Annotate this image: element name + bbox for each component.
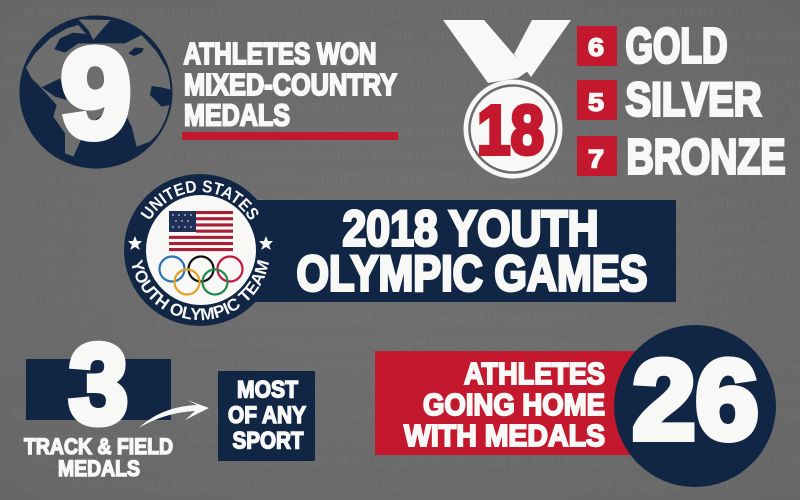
silver count: SILVER [626,72,762,126]
navy circle [614,325,776,487]
big number 9: 9 [61,23,131,164]
silver count [577,72,762,126]
panel: medal count [443,18,786,184]
logo: united states youth olympic team [124,174,273,326]
big number 26: 26 [632,338,758,462]
panel: 2018 youth olympic games banner [124,174,676,326]
callout: most of any sport [218,371,315,461]
heading: athletes won mixed-country medals: MEDALS [184,98,290,132]
arrow [139,400,209,428]
flag [169,211,233,251]
icon: medal: 18 [477,91,544,169]
banner label: GOING HOME [423,387,605,422]
gold count [577,18,728,74]
banner title: 2018 YOUTH [342,200,598,256]
panel: athletes going home with medals [375,325,776,487]
banner background [240,200,676,302]
panel: track and field medals [24,322,315,481]
bronze count: 7 [588,146,604,174]
banner label: WITH MEDALS [404,418,605,453]
callout: most of any sport: SPORT [232,428,304,454]
silver count: 5 [588,89,604,117]
heading: athletes won mixed-country medals: MIXED-COUNTRY [184,68,397,102]
logo: united states youth olympic team: UNITED STATES [140,180,258,220]
red banner [375,351,635,455]
banner label: ATHLETES [464,356,605,391]
label: track and field medals [24,434,173,481]
navy bar [26,359,171,420]
red underline [182,132,398,140]
label: track and field medals: TRACK & FIELD [24,434,173,459]
banner label [404,356,605,453]
callout: most of any sport: OF ANY [228,402,306,429]
heading: athletes won mixed-country medals [184,37,397,132]
panel: mixed-country medals [20,16,398,168]
icon: medal [443,20,571,178]
icon: globe [20,16,172,168]
heading: athletes won mixed-country medals: ATHLETES WON [184,37,376,71]
callout: most of any sport: MOST [237,376,298,404]
olympic rings [160,256,242,294]
logo: united states youth olympic team: YOUTH OLYMPIC TEAM [132,259,269,320]
gold count: GOLD [626,18,728,74]
label: track and field medals: MEDALS [58,456,140,481]
gold count: 6 [588,34,604,62]
big number 3: 3 [69,322,128,446]
banner title [296,200,648,302]
banner title: OLYMPIC GAMES [296,246,648,302]
